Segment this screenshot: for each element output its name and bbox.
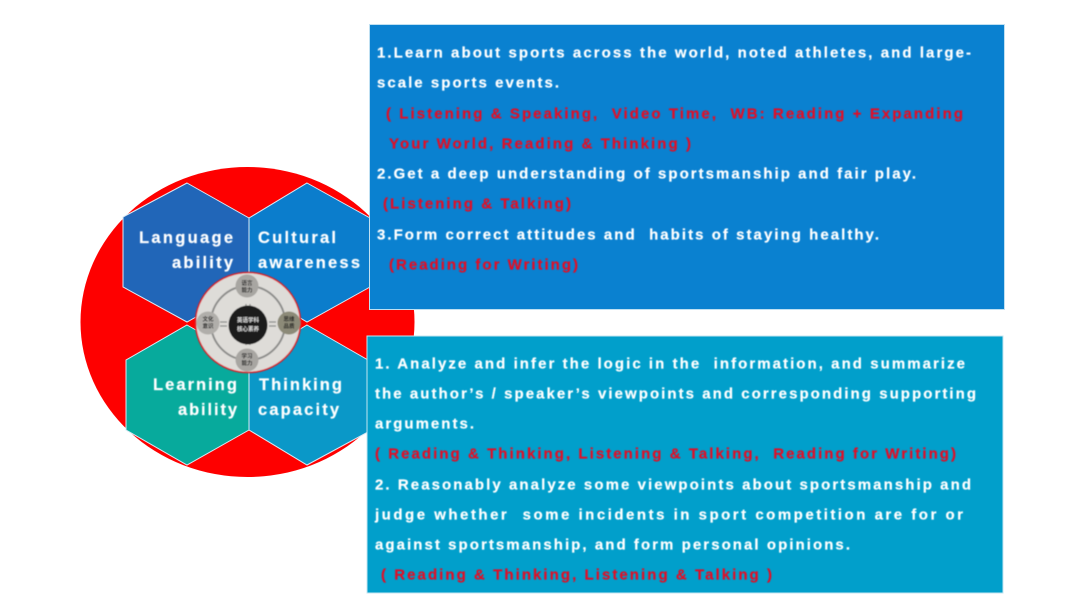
centre circle — [228, 306, 268, 344]
panel text: Your World, Reading & Thinking ) — [389, 136, 691, 152]
panel text: arguments. — [375, 416, 474, 432]
panel text: 2.Get a deep understanding of sportsmanship and fair play. — [377, 166, 916, 182]
hexagon: language ability — [123, 183, 249, 322]
label: language ability: Language — [139, 229, 233, 247]
connector ticks — [220, 304, 276, 345]
node: language: 语言 — [241, 279, 253, 287]
node: culture: 意识 — [202, 322, 214, 330]
panel text: 3.Form correct attitudes and habits of staying healthy. — [377, 226, 879, 244]
panel: sports knowledge objectives — [370, 24, 1004, 310]
panel text: ( Reading & Thinking, Listening & Talking ) — [381, 566, 772, 584]
panel text: against sportsmanship, and form personal opinions. — [375, 536, 850, 554]
label: language ability — [139, 229, 234, 272]
panel text: ( Reading & Thinking, Listening & Talking, Reading for Writing) — [375, 446, 956, 462]
panel text: (Reading for Writing) — [389, 256, 578, 274]
panel background — [367, 336, 1003, 593]
panel text: ( Listening & Speaking, Video Time, WB: Reading + Expanding — [386, 106, 963, 122]
panel background — [370, 24, 1004, 310]
label: thinking capacity: capacity — [258, 401, 340, 419]
panel text: 1.Learn about sports across the world, noted athletes, and large- — [377, 44, 971, 62]
centre circle: 核心素养 — [237, 325, 259, 333]
node: culture — [196, 312, 220, 334]
panel text — [377, 44, 971, 274]
label: language ability: ability — [172, 254, 234, 272]
label: cultural awareness: Cultural — [258, 229, 336, 247]
node: thinking: 思维 — [283, 315, 295, 323]
central core competency emblem — [196, 272, 300, 372]
hexagon: learning ability — [126, 325, 249, 465]
node: language — [236, 274, 258, 298]
panel text: scale sports events. — [377, 74, 559, 92]
label: learning ability — [153, 376, 238, 419]
hexagon: cultural awareness — [249, 183, 370, 322]
node: learning: 能力 — [241, 359, 253, 367]
node: learning — [236, 348, 258, 372]
panel text: (Listening & Talking) — [383, 196, 571, 212]
centre circle: 英语学科 — [237, 316, 259, 324]
label: thinking capacity — [258, 376, 342, 419]
node: thinking — [278, 312, 300, 334]
node: culture: 文化 — [202, 315, 214, 323]
red background circle — [80, 167, 414, 477]
node: thinking: 品质 — [283, 322, 295, 330]
panel text: judge whether some incidents in sport competition are for or — [374, 506, 963, 524]
connecting ring — [211, 286, 285, 360]
node: learning: 学习 — [241, 352, 253, 360]
core competencies diagram — [80, 167, 414, 477]
label: thinking capacity: Thinking — [259, 376, 342, 394]
label: cultural awareness: awareness — [258, 254, 360, 272]
panel text: 2. Reasonably analyze some viewpoints about sportsmanship and — [375, 476, 971, 494]
hexagon: thinking capacity — [249, 325, 368, 465]
panel text: 1. Analyze and infer the logic in the information, and summarize — [375, 356, 965, 372]
emblem disc — [196, 272, 300, 372]
panel text — [374, 356, 976, 584]
label: cultural awareness — [258, 229, 360, 272]
label: learning ability: Learning — [153, 376, 237, 394]
panel text: the author’s / speaker’s viewpoints and corresponding supporting — [375, 386, 976, 402]
node: language: 能力 — [241, 286, 253, 294]
label: learning ability: ability — [178, 401, 238, 419]
panel: analysis objectives — [367, 336, 1003, 593]
